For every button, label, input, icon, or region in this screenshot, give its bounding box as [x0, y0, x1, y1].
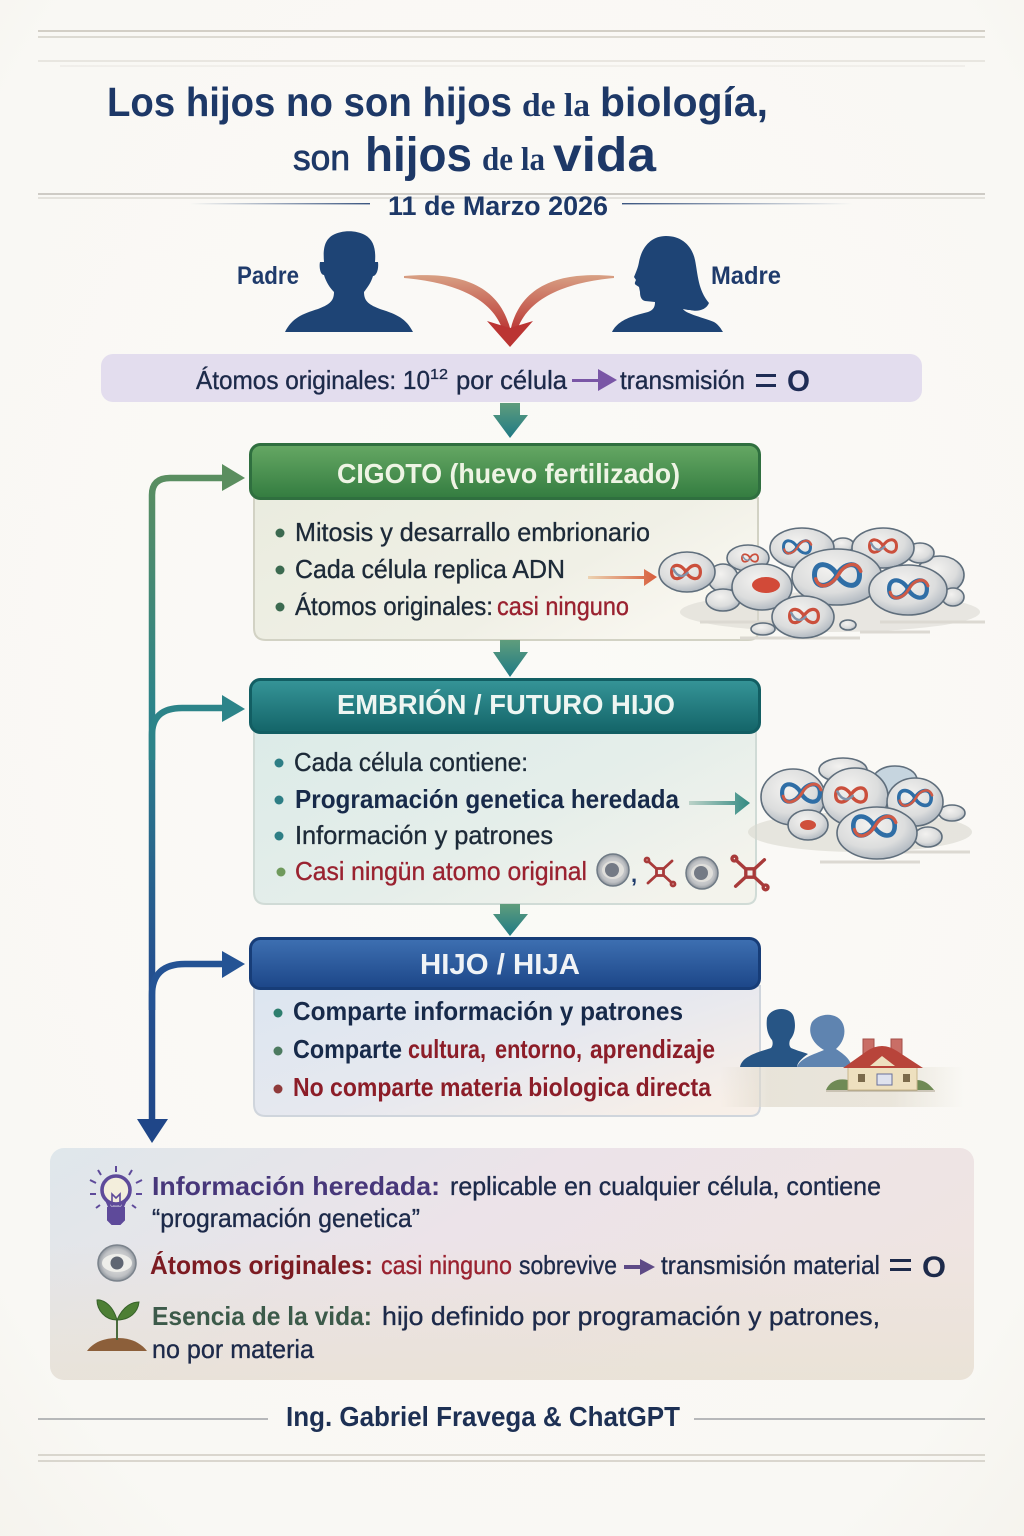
text: inherited information: replicable en cualquier célula, contiene	[450, 1171, 881, 1201]
footer credit: Ing. Gabriel Fravega & ChatGPT	[286, 1401, 680, 1432]
bottom double rule	[38, 1455, 985, 1461]
icon: sprout	[87, 1300, 147, 1351]
title: hijos	[365, 129, 472, 182]
label: Padre: Padre	[237, 262, 299, 290]
arrow: parents to atoms	[404, 275, 614, 347]
banner: original atoms: 12	[430, 366, 448, 383]
icon: light bulb	[90, 1166, 142, 1224]
arrow: cigoto to embrion	[493, 640, 528, 677]
arrow: to stones 1	[588, 569, 657, 586]
panel: summary	[50, 1148, 974, 1380]
heading: cigoto	[250, 444, 760, 498]
panel: hijo body	[254, 986, 760, 1116]
illustration: stones embrion	[748, 758, 972, 862]
text: original atoms: transmisión material	[661, 1250, 880, 1280]
title rule	[38, 194, 985, 204]
date: 11 de Marzo 2026	[388, 191, 608, 221]
panel: cigoto body	[254, 498, 758, 640]
title: Los hijos no son hijos	[107, 79, 512, 125]
panel: embrion body: Cada célula contiene:	[294, 747, 528, 777]
panel: hijo body: cultura,	[408, 1034, 486, 1064]
panel: embrion body: Información y patrones	[295, 820, 553, 850]
text: essence of life: Esencia de la vida:	[152, 1301, 372, 1331]
text: original atoms: casi ninguno	[381, 1250, 512, 1280]
panel: cigoto body: casi ninguno	[497, 591, 629, 621]
text: original atoms: Átomos originales:	[150, 1250, 373, 1280]
top double rule	[38, 31, 985, 66]
heading: cigoto: CIGOTO (huevo fertilizado)	[337, 458, 680, 489]
panel: hijo body: Comparte	[293, 1034, 402, 1064]
icons: atoms and crosses	[597, 854, 768, 890]
label: Madre: Madre	[711, 262, 781, 290]
title: de la	[522, 88, 590, 124]
panel: embrion body: Casi ningün atomo original	[295, 856, 587, 886]
panel: hijo body: No comparte materia biologica directa	[293, 1072, 711, 1102]
arrow: embrion to hijo	[493, 904, 528, 936]
text: original atoms: sobrevive	[519, 1250, 617, 1280]
title: de la	[482, 142, 545, 178]
banner: original atoms: Átomos originales: 10	[196, 365, 430, 395]
panel: embrion body: Programación genetica heredada	[295, 784, 679, 814]
arrow: banner to cigoto	[493, 403, 528, 438]
panel: cigoto body: Cada célula replica ADN	[295, 554, 565, 584]
panel: embrion body	[254, 732, 756, 904]
icon: mother silhouette	[612, 236, 723, 332]
text: original atoms: O	[922, 1251, 946, 1284]
text: original atoms	[150, 1250, 946, 1284]
title: vida	[553, 129, 656, 182]
text: essence of life	[152, 1301, 880, 1364]
text: inherited information	[152, 1171, 881, 1233]
heading: hijo: HIJO / HIJA	[420, 949, 580, 981]
panel: hijo body: aprendizaje	[590, 1034, 715, 1064]
arrow: to stones 2	[689, 792, 750, 815]
text: essence of life: no por materia	[152, 1334, 315, 1364]
banner: original atoms	[101, 354, 922, 402]
panel: cigoto body: Mitosis y desarrallo embrionario	[295, 517, 650, 547]
illustration: family and house	[720, 1009, 965, 1107]
text: essence of life: hijo definido por programación y patrones,	[382, 1301, 880, 1331]
connector: left flow arrows	[137, 464, 245, 1143]
panel: cigoto body: Átomos originales:	[295, 591, 493, 621]
heading: embrion	[250, 680, 760, 732]
illustration: stones cigoto	[659, 528, 985, 638]
banner: original atoms: O	[787, 365, 810, 398]
banner: original atoms: por célula	[456, 365, 568, 395]
title	[107, 79, 768, 182]
text: inherited information: “programación genetica”	[152, 1203, 420, 1233]
heading: hijo	[250, 938, 760, 988]
text: inherited information: Información heredada:	[152, 1171, 440, 1201]
title: son	[293, 137, 350, 178]
icon: father silhouette	[285, 231, 413, 332]
panel: hijo body: Comparte información y patrones	[293, 996, 683, 1026]
heading: embrion: EMBRIÓN / FUTURO HIJO	[337, 689, 675, 720]
panel: hijo body: entorno,	[495, 1034, 582, 1064]
icons: atoms and crosses: ,	[631, 862, 637, 887]
title: biología,	[600, 79, 768, 125]
icon: atom	[98, 1245, 136, 1281]
banner: original atoms: transmisión	[620, 365, 745, 395]
